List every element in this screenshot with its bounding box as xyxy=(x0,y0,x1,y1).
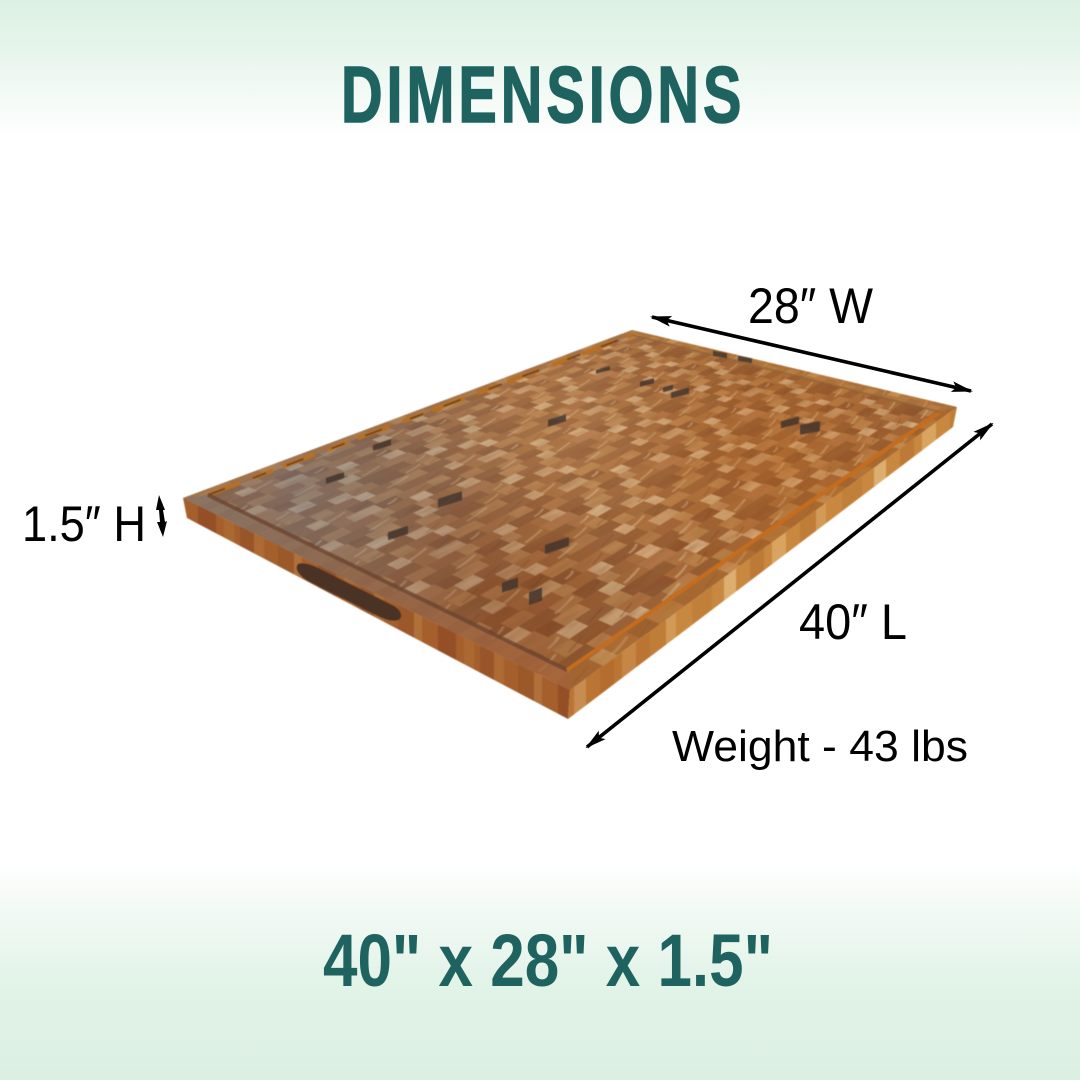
right side with staves xyxy=(568,407,957,719)
length label: 40″ L xyxy=(799,594,907,650)
surface colour shading xyxy=(214,342,926,662)
arrow: height xyxy=(156,495,167,537)
juice groove xyxy=(208,335,940,670)
title: DIMENSIONS xyxy=(341,50,745,139)
weight label: Weight - 43 lbs xyxy=(672,722,968,771)
arrow: length xyxy=(587,424,992,747)
arrow: width xyxy=(652,317,971,391)
cutting board illustration xyxy=(182,329,958,720)
width label: 28″ W xyxy=(748,278,874,334)
darker corner of right side xyxy=(568,632,650,719)
dark accent tiles xyxy=(326,351,820,605)
background: bottom green fade xyxy=(0,860,1080,1080)
board rim xyxy=(183,330,957,690)
background: top green fade xyxy=(0,0,1080,140)
handle slot xyxy=(297,563,401,621)
dimensions summary: 40" x 28" x 1.5" xyxy=(323,919,773,1002)
end-grain mosaic surface xyxy=(183,330,957,690)
left long side with staves xyxy=(183,498,570,719)
board sides, shading and juice groove xyxy=(182,330,958,720)
height label: 1.5″ H xyxy=(22,496,146,552)
